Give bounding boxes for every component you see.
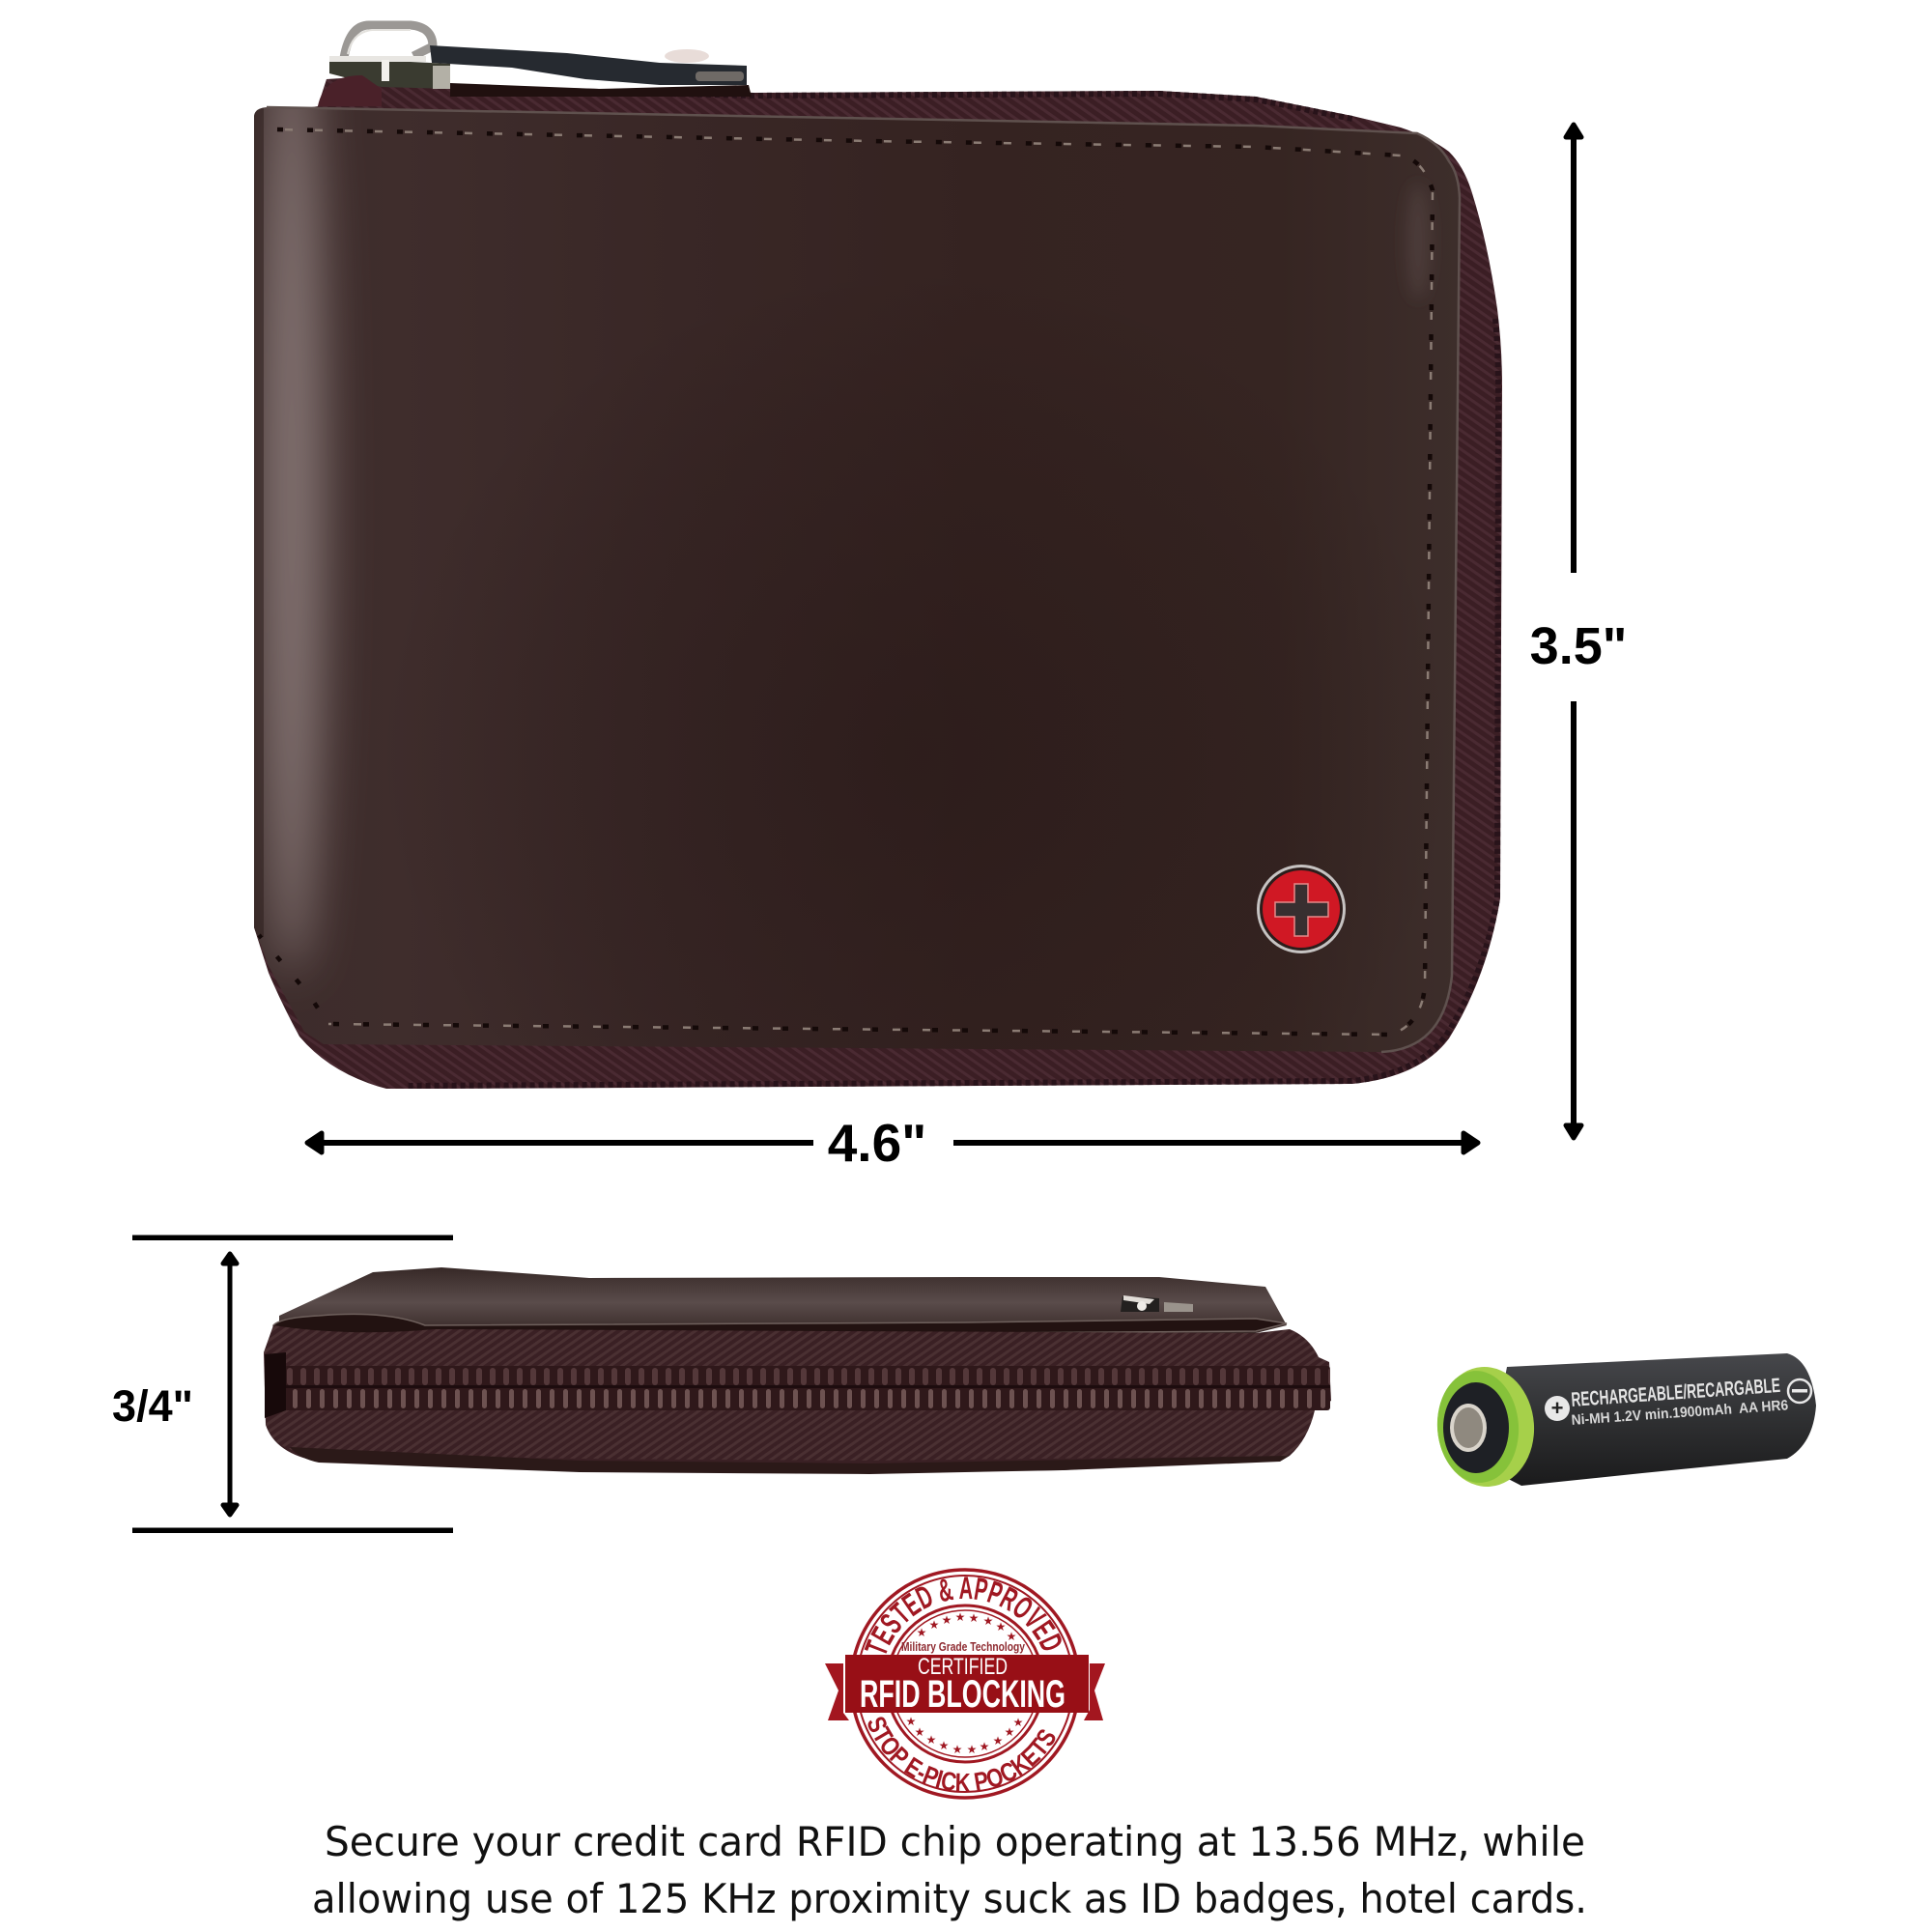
- seal top stars: ★: [917, 1626, 926, 1639]
- seal top stars: ★: [929, 1618, 939, 1632]
- seal bottom stars: ★: [939, 1739, 949, 1752]
- seal rings: [851, 1570, 1079, 1798]
- seal bottom stars: ★: [952, 1743, 962, 1756]
- seal bottom stars: ★: [980, 1740, 989, 1753]
- seal bottom stars: ★: [993, 1734, 1003, 1747]
- zipper pull: [318, 25, 752, 106]
- ribbon text certified: CERTIFIED: [918, 1654, 1008, 1680]
- battery terminal: [1443, 1382, 1509, 1473]
- ribbon text RFID blocking: RFID BLOCKING: [860, 1673, 1065, 1716]
- ribbon right tail: [1084, 1663, 1105, 1720]
- label: thickness three quarter inch: 3/4": [112, 1381, 193, 1431]
- seal tagline: Military Grade Technology: [901, 1639, 1026, 1654]
- ribbon: [845, 1655, 1089, 1713]
- arrow: width dimension: [307, 1133, 1478, 1152]
- seal top stars: ★: [955, 1610, 965, 1624]
- seal bottom stars: ★: [1013, 1716, 1023, 1729]
- panel: wallet side view: [264, 1267, 1331, 1474]
- panel: AA battery size comparison: [1434, 1353, 1816, 1490]
- caption text: [312, 1818, 1587, 1922]
- seal bottom stars: ★: [906, 1715, 916, 1728]
- battery label line 2: Ni-MH 1.2V min.1900mAh AA HR6: [1571, 1397, 1789, 1429]
- seal top stars: ★: [996, 1620, 1006, 1634]
- leather front panel: [254, 10, 1462, 1053]
- red cross logo badge: [1257, 865, 1346, 953]
- thickness bottom rule: [132, 1528, 453, 1533]
- zipper teeth: [284, 1366, 1330, 1410]
- label: height 3.5 inches: 3.5": [1530, 617, 1627, 675]
- seal top stars: ★: [1007, 1630, 1016, 1643]
- battery plus symbol: [1545, 1396, 1570, 1421]
- seal top stars: ★: [942, 1613, 952, 1627]
- battery green cap: [1434, 1364, 1538, 1490]
- caption text: Secure your credit card RFID chip operating at 13.56 MHz, while: [325, 1818, 1585, 1865]
- arrow: thickness dimension: [223, 1254, 237, 1515]
- battery body: [1488, 1353, 1816, 1486]
- stitching: [259, 129, 1433, 1035]
- zipper opening shadow: [265, 1352, 286, 1418]
- battery label line 1: RECHARGEABLE/RECARGABLE: [1571, 1375, 1781, 1411]
- zipper tape surround: [254, 75, 1502, 1089]
- seal bottom stars: ★: [915, 1725, 924, 1739]
- zipper band: [264, 1325, 1331, 1474]
- seal top stars: ★: [983, 1614, 993, 1628]
- seal top stars: ★: [969, 1611, 979, 1625]
- leather front edge: [273, 1314, 1287, 1338]
- seal bottom stars: ★: [926, 1733, 936, 1747]
- label: width 4.6 inches: 4.6": [828, 1113, 926, 1173]
- panel: RFID blocking seal: [825, 1568, 1105, 1800]
- battery minus symbol: [1788, 1379, 1811, 1403]
- battery plus symbol: +: [1551, 1396, 1563, 1420]
- logo pin edge: [1121, 1295, 1193, 1312]
- seal bottom stars: ★: [967, 1743, 977, 1756]
- thickness top rule: [132, 1235, 453, 1240]
- ribbon left tail: [825, 1663, 849, 1720]
- seal top text: TESTED & APPROVED: [864, 1577, 1062, 1654]
- arrow: height dimension: [1566, 125, 1581, 1138]
- panel: wallet front view: [254, 10, 1502, 1089]
- caption text: allowing use of 125 KHz proximity suck as ID badges, hotel cards.: [312, 1875, 1587, 1922]
- leather top of side view: [279, 1267, 1287, 1338]
- seal bottom text: STOP E-PICK POCKETS: [867, 1717, 1055, 1791]
- seal bottom stars: ★: [1005, 1725, 1014, 1739]
